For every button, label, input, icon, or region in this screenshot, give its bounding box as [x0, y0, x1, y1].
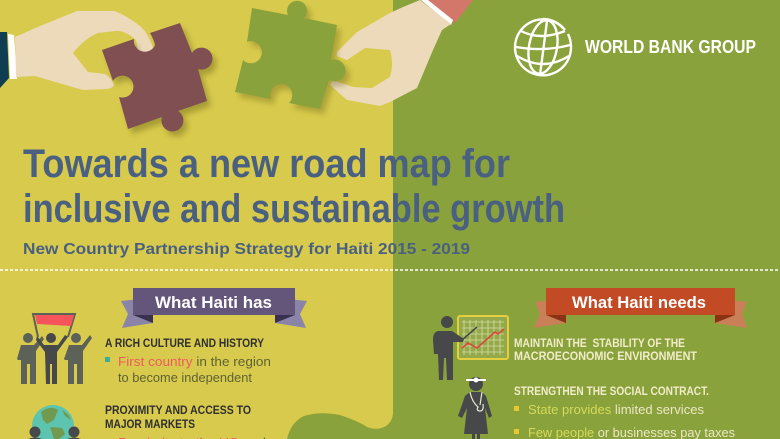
title	[23, 142, 565, 231]
text block: rich culture: A RICH CULTURE AND HISTORY	[105, 338, 264, 350]
illustration: left hand with sleeve	[0, 11, 156, 90]
text block: proximity and access: PROXIMITY AND ACCESS TO	[105, 405, 251, 417]
title: inclusive and sustainable growth	[23, 187, 565, 231]
banner: What Haiti needs: What Haiti needs	[572, 293, 706, 312]
banner: What Haiti has: What Haiti has	[155, 293, 272, 312]
logo wordmark: WORLD BANK GROUP	[585, 37, 756, 57]
icon: globe with people	[28, 405, 81, 439]
icon: doctor with stethoscope	[458, 377, 492, 439]
logo: World Bank Group	[515, 18, 756, 76]
subtitle: New Country Partnership Strategy for Haiti 2015 - 2019	[23, 241, 470, 258]
text block: proximity and access: MAJOR MARKETS	[105, 419, 195, 431]
text block: rich culture: First country in the region	[118, 355, 271, 369]
illustration: maroon puzzle piece	[102, 23, 216, 136]
banner: What Haiti needs	[534, 288, 747, 328]
text block: rich culture: to become independent	[118, 371, 253, 385]
icon: presenter with chart	[433, 316, 508, 380]
text block: macroeconomic stability: MAINTAIN THE STABILITY OF THE	[514, 338, 685, 350]
illustration: green puzzle piece	[235, 1, 349, 114]
icon: crowd with flag	[17, 314, 92, 384]
text block: social contract: State provides limited services	[528, 403, 704, 417]
title: Towards a new road map for	[23, 142, 510, 186]
text block: proximity and access	[105, 405, 266, 439]
text block: macroeconomic stability	[514, 338, 697, 363]
text block: social contract	[514, 386, 735, 439]
icon: wireframe globe	[515, 18, 571, 76]
illustration: right hand with sleeve	[330, 0, 473, 106]
text block: rich culture	[105, 338, 271, 385]
banner: What Haiti has	[121, 288, 307, 328]
text block: social contract: STRENGTHEN THE SOCIAL CONTRACT.	[514, 386, 709, 398]
text block: macroeconomic stability: MACROECONOMIC ENVIRONMENT	[514, 351, 697, 363]
